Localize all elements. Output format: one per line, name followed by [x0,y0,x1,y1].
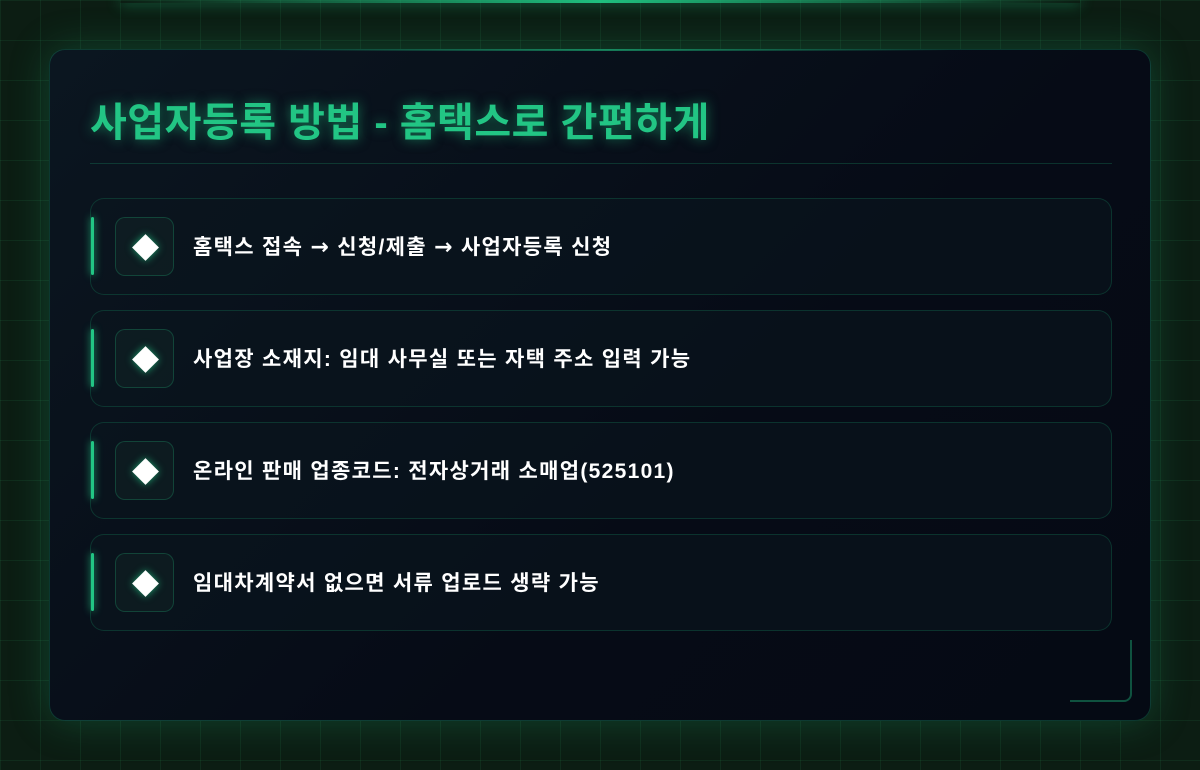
text: step 4: 임대차계약서 없으면 서류 업로드 생략 가능 [193,572,600,595]
text: step 2: 사업장 소재지: 임대 사무실 또는 자택 주소 입력 가능 [193,348,691,371]
icon: diamond [115,553,174,612]
text: step 1: 홈택스 접속 → 신청/제출 → 사업자등록 신청 [193,235,612,260]
icon: diamond [115,217,174,276]
item 2 [90,310,1112,407]
icon: diamond [115,329,174,388]
icon: diamond [115,441,174,500]
item 1 [90,198,1112,295]
title: 사업자등록 방법 - 홈택스로 간편하게 [90,101,710,145]
item 4 [90,534,1112,631]
item 3 [90,422,1112,519]
text: step 3: 온라인 판매 업종코드: 전자상거래 소매업(525101) [193,460,675,483]
